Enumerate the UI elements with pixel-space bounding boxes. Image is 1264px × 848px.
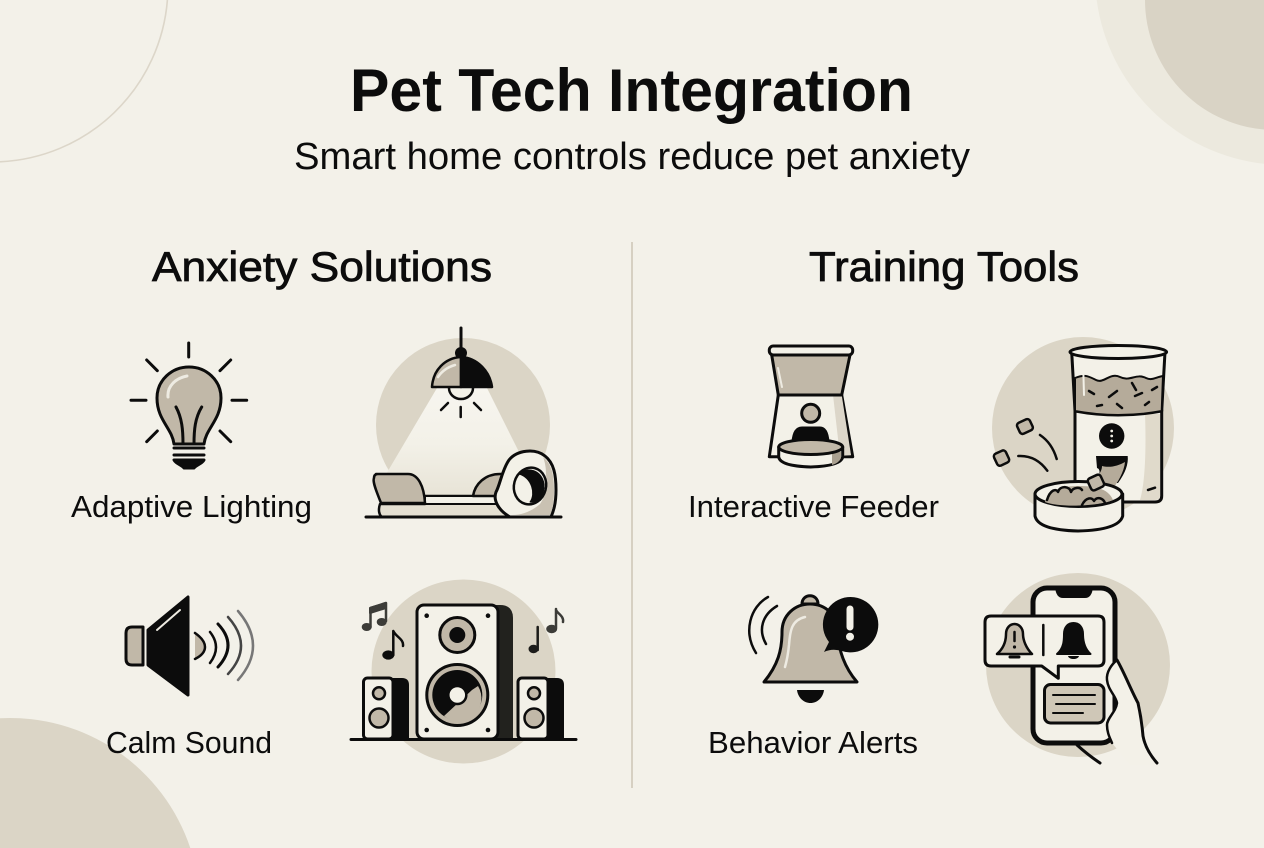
- label: adaptive lighting: Adaptive Lighting: [71, 489, 312, 524]
- title: Pet Tech Integration: [350, 57, 913, 124]
- heading: anxiety solutions: Anxiety Solutions: [152, 243, 492, 290]
- label: interactive feeder: Interactive Feeder: [688, 489, 939, 524]
- subtitle: Smart home controls reduce pet anxiety: [294, 136, 970, 178]
- panel: anxiety solutions: [71, 243, 576, 764]
- illustration: phone with alert notifications in hand: [985, 573, 1170, 765]
- illustration: pendant lamp over pet bed: [366, 328, 561, 517]
- heading: training tools: Training Tools: [809, 243, 1079, 290]
- label: calm sound: Calm Sound: [106, 725, 272, 760]
- icon: small pet feeder: [769, 346, 853, 467]
- label: behavior alerts: Behavior Alerts: [708, 725, 918, 760]
- illustration: speaker system with music notes: [351, 580, 576, 764]
- icon: speaker with sound waves: [126, 597, 253, 695]
- icon: light bulb: [131, 343, 247, 468]
- icon: alert bell with exclamation bubble: [749, 596, 878, 703]
- panel: training tools: [688, 243, 1174, 765]
- illustration: automatic feeder with bowl: [992, 337, 1174, 531]
